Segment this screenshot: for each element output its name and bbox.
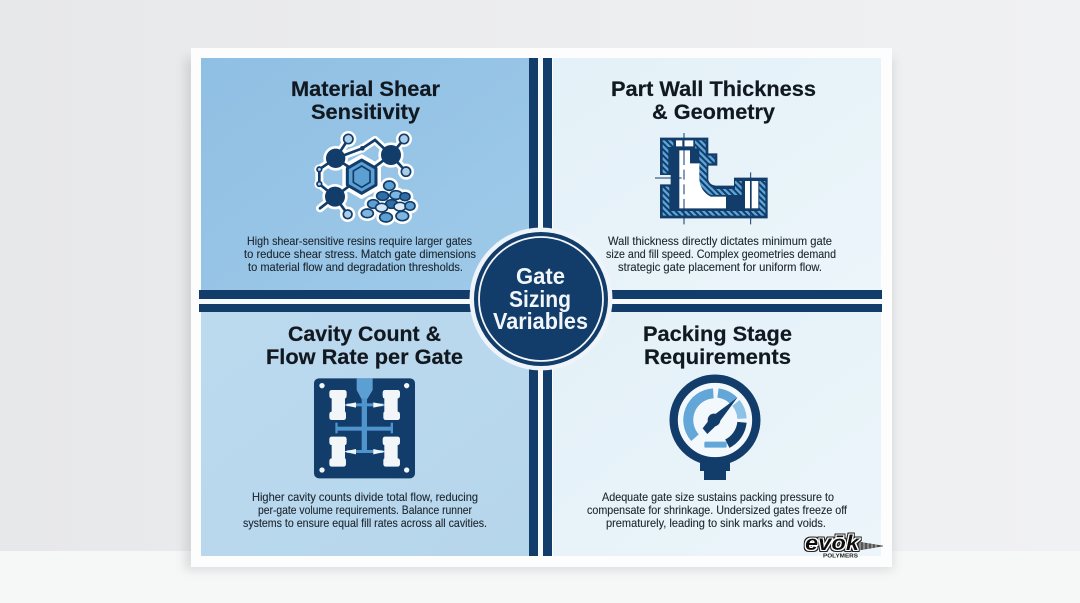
icon: part cross-section [655,133,768,224]
body text: material shear sensitivity: High shear-sensitive resins require larger gates [247,235,472,248]
body text: packing stage requirements: compensate for shrinkage. Undersized gates freeze off [587,504,848,517]
body text: part wall thickness and geometry [606,235,836,274]
heading: packing stage requirements: Packing Stage [643,322,792,346]
logo: evok polymers: POLYMERS [823,554,858,560]
heading: material shear sensitivity: Sensitivity [311,100,420,124]
center badge: gate sizing variables: Sizing [509,286,571,312]
heading: cavity count and flow rate: Flow Rate per Gate [266,345,463,369]
center badge: gate sizing variables: Gate [516,263,565,289]
logo: evok polymers [805,532,883,560]
body text: cavity count and flow rate [243,491,487,530]
icon: pressure gauge [674,379,756,480]
body text: cavity count and flow rate: systems to ensure equal fill rates across all cavities. [243,517,487,530]
panel: material shear sensitivity [201,58,529,290]
body text: packing stage requirements [587,491,848,530]
panel: packing stage requirements [553,312,881,556]
heading: material shear sensitivity [291,77,441,124]
body text: part wall thickness and geometry: strategic gate placement for uniform flow. [618,261,822,274]
poster board [191,48,892,567]
icon: molecule and resin pellets [314,131,418,225]
center badge: gate sizing variables [470,228,612,370]
body text: part wall thickness and geometry: Wall thickness directly dictates minimum gate [608,235,832,248]
body text: material shear sensitivity: to reduce shear stress. Match gate dimensions [244,248,476,261]
body text: material shear sensitivity: to material flow and degradation thresholds. [248,261,463,274]
body text: part wall thickness and geometry: size and fill speed. Complex geometries demand [606,248,836,261]
icon: four-cavity mold layout [314,378,415,478]
heading: part wall thickness and geometry [611,77,816,124]
heading: part wall thickness and geometry: & Geometry [652,100,775,124]
panel: part wall thickness and geometry [553,58,881,290]
body text: cavity count and flow rate: per-gate volume requirements. Balance runner [258,504,472,517]
logo: evok polymers: evōk [805,532,860,555]
panel: cavity count and flow rate per gate [201,312,529,556]
heading: packing stage requirements: Requirements [644,345,791,369]
body text: material shear sensitivity [244,235,476,274]
heading: packing stage requirements [643,322,792,369]
center badge: gate sizing variables: Variables [493,308,588,334]
body text: packing stage requirements: Adequate gate size sustains packing pressure to [602,491,834,504]
body text: cavity count and flow rate: Higher cavity counts divide total flow, reducing [252,491,478,504]
heading: cavity count and flow rate: Cavity Count & [288,322,441,346]
heading: cavity count and flow rate [266,322,463,369]
heading: material shear sensitivity: Material Shear [291,77,441,101]
body text: packing stage requirements: prematurely, leading to sink marks and voids. [606,517,826,530]
heading: part wall thickness and geometry: Part Wall Thickness [611,77,816,101]
